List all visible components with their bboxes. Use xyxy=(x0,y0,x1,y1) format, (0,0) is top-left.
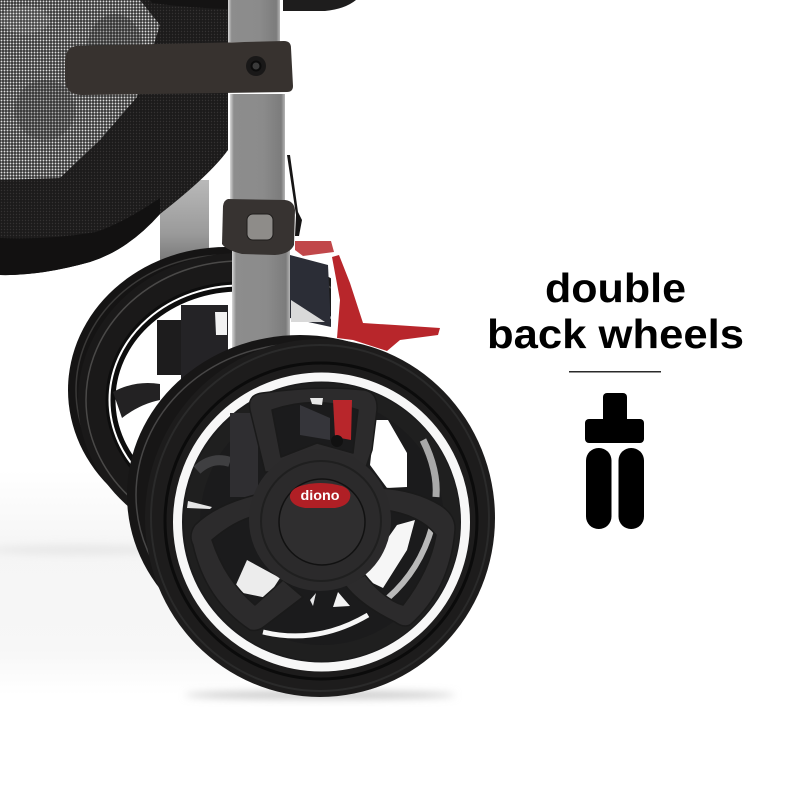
spokes xyxy=(191,388,455,630)
spoke top xyxy=(250,388,377,472)
front wheel xyxy=(145,339,495,697)
white rim ring xyxy=(178,377,466,667)
heading: double xyxy=(545,265,686,311)
spoke right xyxy=(345,488,455,626)
frame bracket bar xyxy=(65,41,293,95)
red brake tab xyxy=(295,241,334,256)
heading xyxy=(487,265,744,357)
back wheels pair xyxy=(68,247,331,506)
mesh panel xyxy=(0,0,160,180)
icon: double wheels xyxy=(585,393,644,529)
top fabric fragment xyxy=(283,0,356,11)
top spoke hole contents xyxy=(300,398,352,447)
red brake lever xyxy=(332,255,440,351)
ground shadow xyxy=(0,470,455,699)
tyre xyxy=(145,339,495,697)
wheel axle post behind xyxy=(230,413,258,497)
rear frame tube xyxy=(160,180,209,270)
spoke left xyxy=(191,495,303,630)
strap xyxy=(287,155,302,236)
stroller basket xyxy=(0,0,228,275)
main frame tube xyxy=(228,0,290,355)
red badge xyxy=(290,483,350,508)
frame clip xyxy=(222,199,295,255)
second front wheel xyxy=(127,335,473,655)
screw xyxy=(246,56,266,76)
logo text: diono xyxy=(300,487,340,503)
divider line xyxy=(569,371,661,372)
inner rim xyxy=(192,391,452,653)
hub xyxy=(249,449,391,591)
heading: back wheels xyxy=(487,311,744,357)
see-through wheel gaps xyxy=(187,420,436,636)
